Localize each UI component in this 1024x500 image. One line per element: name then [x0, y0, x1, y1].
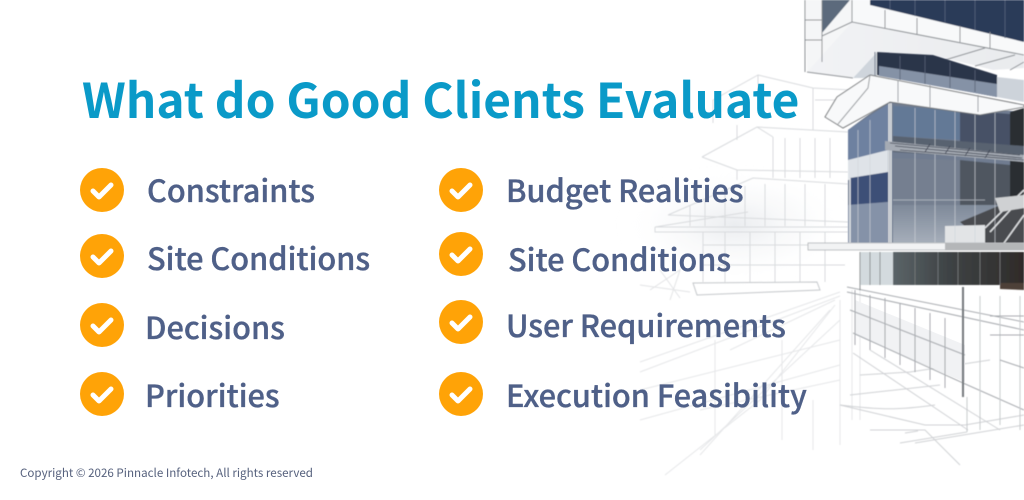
copyright footer: Copyright © 2026 Pinnacle Infotech, All rights reserved: [20, 465, 313, 481]
item text: Site Conditions: Site Conditions: [147, 234, 370, 279]
floor grid: [840, 350, 1024, 465]
second slab: [825, 75, 1024, 128]
second glass band: [853, 52, 1024, 102]
icon: check: [439, 232, 483, 276]
main glass mass: [848, 100, 1024, 243]
right checklist: [439, 166, 807, 416]
left checklist: [80, 166, 370, 416]
item text: User Requirements: User Requirements: [506, 301, 786, 346]
icon: check: [80, 168, 124, 212]
item text: Budget Realities: Budget Realities: [506, 166, 744, 211]
item text: Site Conditions: Site Conditions: [508, 235, 731, 280]
lower terrace wash: [855, 300, 965, 382]
icon: check: [439, 168, 483, 212]
title: What do Good Clients Evaluate: [82, 62, 799, 132]
item text: Decisions: Decisions: [145, 303, 285, 348]
item text: Priorities: Priorities: [145, 371, 280, 416]
item text: Constraints: Constraints: [147, 166, 315, 211]
podium band: [808, 243, 1024, 290]
tower slab top: [805, 0, 1024, 78]
icon: check: [80, 372, 124, 416]
lower terrace railing: [847, 287, 1024, 432]
icon: check: [439, 300, 483, 344]
icon: check: [80, 303, 124, 347]
ghost wireframe building: [615, 75, 855, 300]
icon: check: [439, 372, 483, 416]
item text: Execution Feasibility: Execution Feasibility: [506, 371, 807, 416]
ghost street lines: [640, 290, 860, 475]
icon: check: [80, 234, 124, 278]
